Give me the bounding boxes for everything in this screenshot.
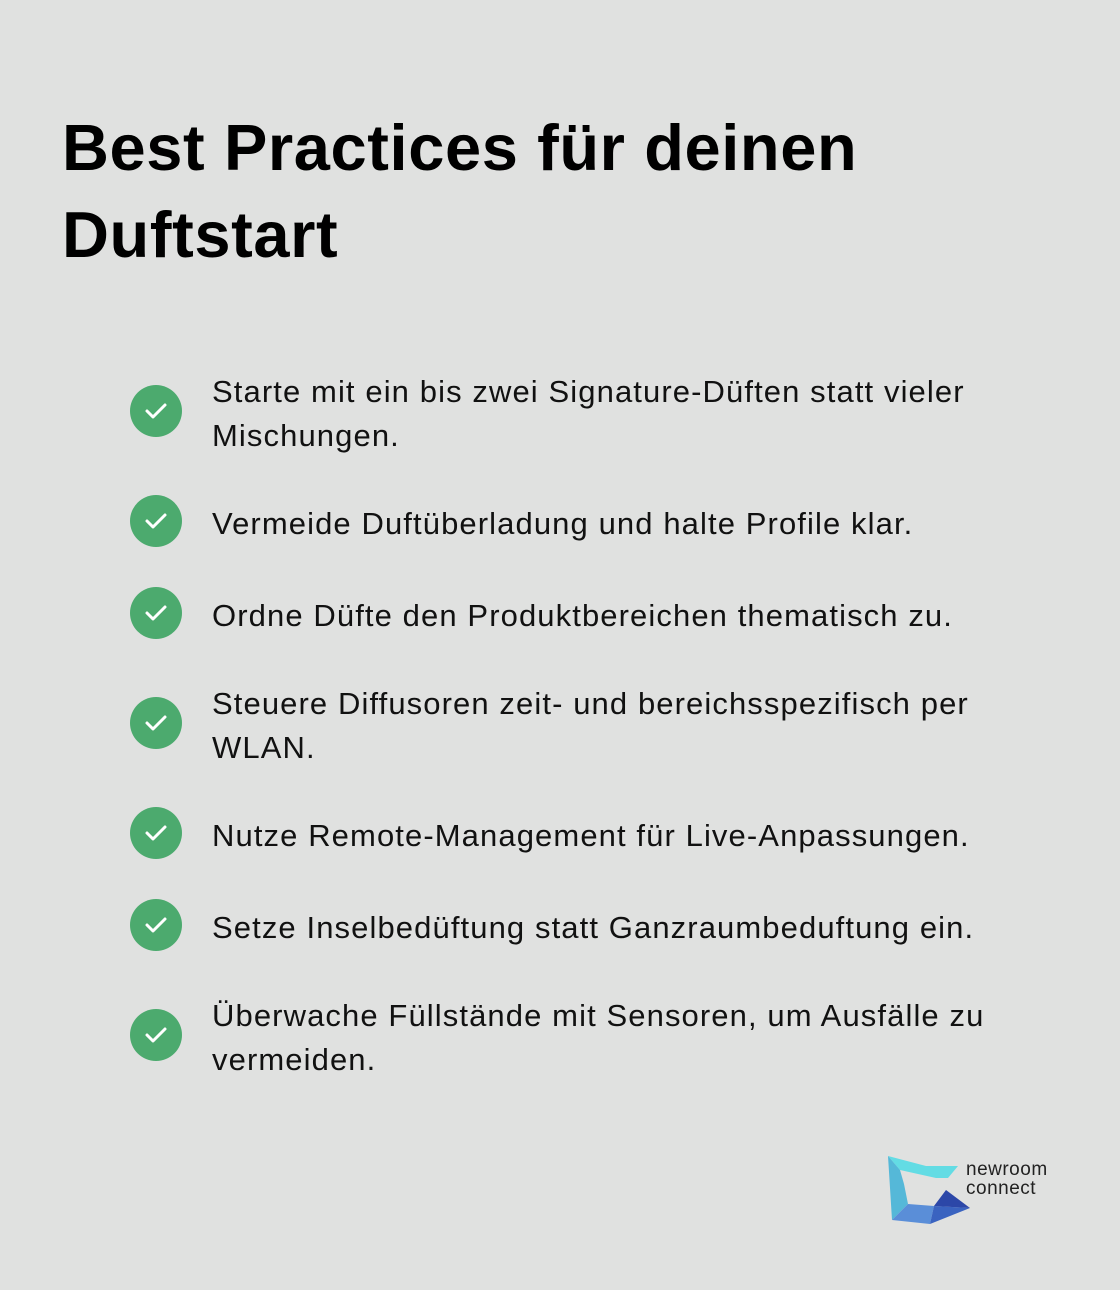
text	[212, 686, 969, 765]
text: Nutze Remote-Management für Live-Anpassungen.	[212, 818, 970, 853]
text: vermeiden.	[212, 1042, 376, 1077]
item 2	[130, 495, 913, 547]
text: Vermeide Duftüberladung und halte Profile klar.	[212, 506, 913, 541]
item 5	[130, 807, 970, 859]
icon: check	[130, 587, 182, 639]
icon: check	[130, 899, 182, 951]
text: Überwache Füllstände mit Sensoren, um Ausfälle zu	[212, 998, 984, 1033]
text: brand: newroom	[966, 1159, 1048, 1180]
icon: check	[130, 385, 182, 437]
icon: check	[130, 807, 182, 859]
icon: check	[130, 1009, 182, 1061]
icon: check	[130, 495, 182, 547]
text	[212, 998, 984, 1077]
text: WLAN.	[212, 730, 316, 765]
logo	[888, 1156, 1048, 1224]
text: Steuere Diffusoren zeit- und bereichsspezifisch per	[212, 686, 969, 721]
item 1	[130, 374, 965, 453]
item 6	[130, 899, 974, 951]
text	[212, 374, 965, 453]
item 7	[130, 998, 984, 1077]
icon: check	[130, 697, 182, 749]
title	[62, 111, 857, 271]
text: Setze Inselbedüftung statt Ganzraumbeduftung ein.	[212, 910, 974, 945]
item 4	[130, 686, 969, 765]
text: Mischungen.	[212, 418, 400, 453]
text: brand: connect	[966, 1178, 1036, 1199]
text: Ordne Düfte den Produktbereichen thematisch zu.	[212, 598, 953, 633]
title: Duftstart	[62, 198, 338, 271]
text: Starte mit ein bis zwei Signature-Düften statt vieler	[212, 374, 965, 409]
title: Best Practices für deinen	[62, 111, 857, 184]
item 3	[130, 587, 953, 639]
icon: logo mark	[888, 1156, 970, 1224]
text: brand	[966, 1159, 1048, 1199]
